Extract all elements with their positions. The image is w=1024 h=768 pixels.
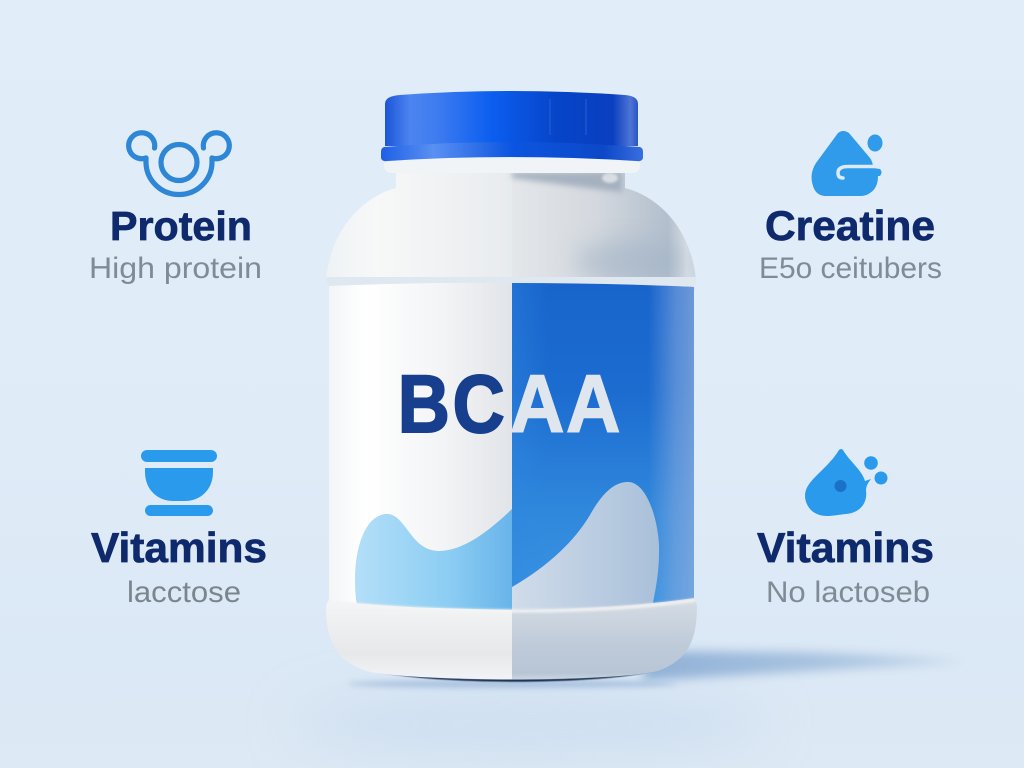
brand name BCAA: BC	[398, 359, 505, 450]
icon: protein molecule	[129, 133, 229, 194]
brand name BCAA: AA	[510, 358, 620, 450]
shoulder shade	[575, 240, 685, 284]
bottle cap	[381, 91, 643, 161]
heading: Creatine: Creatine	[765, 202, 935, 249]
feature: Vitamins bottom left	[91, 450, 267, 609]
neck shadow	[512, 172, 622, 192]
feature: Creatine top right	[759, 131, 942, 285]
bottle base	[326, 597, 697, 680]
heading: Vitamins: Vitamins	[91, 524, 267, 571]
icon: bowl	[141, 450, 217, 516]
caption: No lactoseb: No lactoseb	[766, 576, 930, 609]
contact shadow	[366, 669, 662, 682]
wave: grey blue	[512, 482, 659, 610]
caption: lacctose: lacctose	[127, 576, 241, 609]
neck ring	[384, 158, 640, 173]
caption: High protein: High protein	[89, 252, 262, 285]
feature: Protein top left	[89, 133, 262, 285]
product bottle	[320, 91, 702, 690]
heading: Protein: Protein	[110, 203, 252, 249]
feature: Vitamins bottom right	[757, 449, 934, 609]
icon: droplet with bubbles	[805, 449, 888, 516]
wave: light blue	[355, 509, 512, 610]
caption: E5o ceitubers: E5o ceitubers	[759, 252, 942, 285]
infographic canvas	[90, 91, 954, 768]
heading: Vitamins: Vitamins	[757, 524, 934, 571]
icon: creatine shape	[812, 131, 882, 196]
bottle body	[320, 165, 702, 690]
floor shadow	[290, 651, 965, 760]
brand name BCAA	[398, 358, 620, 450]
